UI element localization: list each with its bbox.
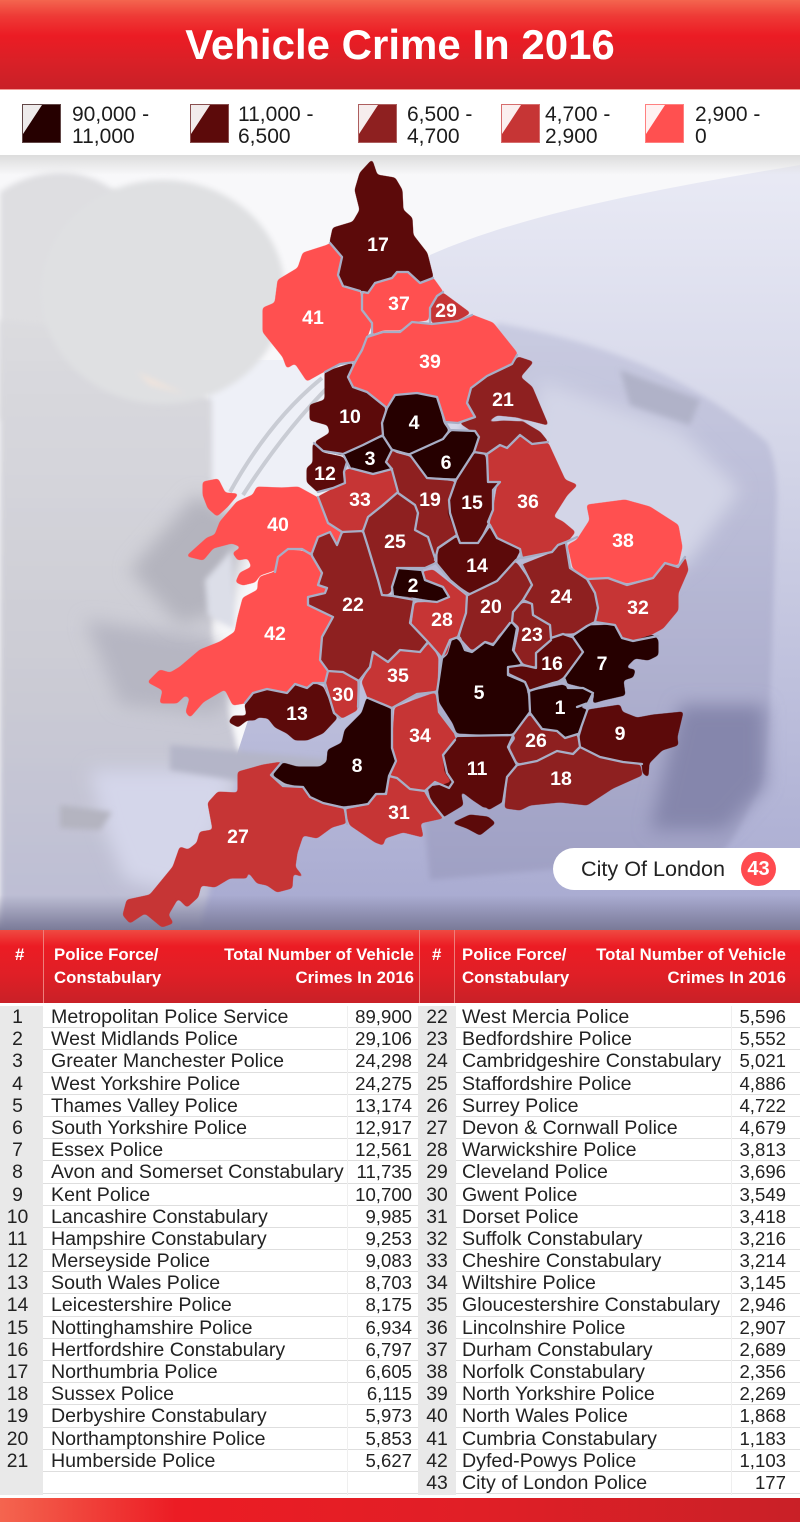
table column left: forces 1 to 21: 9,083 <box>365 1250 412 1271</box>
table header right: Police Force/ <box>462 945 566 964</box>
region 13 South Wales: 13 <box>286 703 308 725</box>
region 8 Avon and Somerset <box>273 698 395 806</box>
table column right: forces 22 to 43: 27 <box>426 1117 448 1139</box>
table column left: forces 1 to 21: 20 <box>7 1428 28 1450</box>
region 40 North Wales: 40 <box>267 514 289 536</box>
region 39 North Yorkshire <box>348 315 517 423</box>
table column left: forces 1 to 21: 6,605 <box>365 1361 412 1382</box>
table header left: # <box>15 945 24 964</box>
legend: 11,000 <box>72 124 135 148</box>
region 13 South Wales <box>229 683 337 740</box>
region 23 Bedfordshire <box>512 603 550 667</box>
table column left: forces 1 to 21: 16 <box>7 1339 28 1361</box>
table column right: forces 22 to 43: 24 <box>426 1050 448 1072</box>
region 39 North Yorkshire: 39 <box>419 351 441 373</box>
table column right: forces 22 to 43: 4,886 <box>739 1073 786 1094</box>
table column left: forces 1 to 21: Kent Police <box>51 1184 150 1206</box>
table header right: Total Number of Vehicle <box>596 945 786 964</box>
table column right: forces 22 to 43: 38 <box>426 1361 448 1383</box>
table column right: forces 22 to 43: 3,214 <box>739 1250 786 1271</box>
region 11 Hampshire: 11 <box>467 758 487 780</box>
table column left: forces 1 to 21: 9,253 <box>365 1228 412 1249</box>
legend item: 11,000 - 6,500 <box>190 103 314 148</box>
region 31 Dorset: 31 <box>388 802 410 824</box>
table column left: forces 1 to 21: 17 <box>7 1361 28 1383</box>
table column right: forces 22 to 43: 5,021 <box>739 1050 786 1071</box>
table column left: forces 1 to 21: Merseyside Police <box>51 1250 210 1272</box>
table column left: forces 1 to 21: 1 <box>12 1006 23 1028</box>
table column right: forces 22 to 43: Surrey Police <box>462 1095 579 1117</box>
legend: 6,500 - <box>407 103 472 126</box>
region 41 Cumbria: 41 <box>302 307 324 329</box>
table column left: forces 1 to 21: 8 <box>12 1161 23 1183</box>
table header right: Crimes In 2016 <box>668 968 786 987</box>
table column right: forces 22 to 43: Cambridgeshire Constabulary <box>462 1050 721 1072</box>
table column right: forces 22 to 43: 33 <box>426 1250 448 1272</box>
table column right: forces 22 to 43: 22 <box>426 1006 448 1028</box>
table column right: forces 22 to 43: Dyfed-Powys Police <box>462 1450 636 1472</box>
table column right: forces 22 to 43: Staffordshire Police <box>462 1073 632 1095</box>
table column left: forces 1 to 21: 11,735 <box>356 1161 412 1182</box>
table column right: forces 22 to 43: 1,183 <box>739 1428 786 1449</box>
region 36 Lincolnshire <box>487 435 577 558</box>
table column left: forces 1 to 21: 9,985 <box>365 1206 412 1227</box>
table column right: forces 22 to 43: 28 <box>426 1139 448 1161</box>
table column right: forces 22 to 43: 43 <box>426 1472 448 1494</box>
region 30 Gwent: 30 <box>332 684 354 706</box>
table column right: forces 22 to 43: Cheshire Constabulary <box>462 1250 661 1272</box>
region 33 Cheshire: 33 <box>349 489 371 511</box>
table column left: forces 1 to 21: Humberside Police <box>51 1450 215 1472</box>
region 24 Cambridgeshire <box>522 543 598 637</box>
region 2 West Midlands <box>392 568 448 601</box>
table column right: forces 22 to 43: 37 <box>426 1339 448 1361</box>
table column right: forces 22 to 43: Bedfordshire Police <box>462 1028 632 1050</box>
region 5 Thames Valley: 5 <box>474 682 485 704</box>
table column left: forces 1 to 21: 18 <box>7 1383 28 1405</box>
table column left: forces 1 to 21: 10,700 <box>355 1184 412 1204</box>
region 29 Cleveland <box>430 293 470 323</box>
table column right: forces 22 to 43: Durham Constabulary <box>462 1339 653 1361</box>
table column left: forces 1 to 21: 13 <box>7 1272 28 1294</box>
region 14 Leicestershire: 14 <box>466 555 488 577</box>
region 10 Lancashire <box>310 363 385 455</box>
region 21 Humberside: 21 <box>492 389 514 411</box>
table column right: forces 22 to 43: 5,552 <box>739 1028 786 1049</box>
table column left: forces 1 to 21: 9 <box>12 1184 23 1206</box>
region 6 South Yorkshire: 6 <box>441 452 452 474</box>
table column right: forces 22 to 43: Warwickshire Police <box>462 1139 637 1161</box>
table column right: forces 22 to 43: North Wales Police <box>462 1405 628 1427</box>
region 34 Wiltshire <box>390 693 455 790</box>
table header right: Constabulary <box>462 968 569 987</box>
legend: 2,900 <box>545 124 598 148</box>
table column left: forces 1 to 21: 5,627 <box>365 1450 412 1471</box>
table column left: forces 1 to 21: 6,115 <box>367 1383 412 1404</box>
table column left: forces 1 to 21: 8,175 <box>365 1294 412 1315</box>
title banner <box>0 0 800 90</box>
region 21 Humberside <box>460 357 548 453</box>
table column right: forces 22 to 43: 3,696 <box>739 1161 786 1182</box>
table column left: forces 1 to 21: 2 <box>12 1028 23 1050</box>
table column left: forces 1 to 21: South Yorkshire Police <box>51 1117 247 1139</box>
table column left: forces 1 to 21: South Wales Police <box>51 1272 220 1294</box>
region 5 Thames Valley <box>437 623 530 735</box>
region 30 Gwent <box>325 672 357 718</box>
legend: 2,900 - <box>695 103 760 126</box>
callout badge <box>741 852 776 886</box>
table column left: forces 1 to 21: 89,900 <box>355 1006 412 1027</box>
table column left: forces 1 to 21: 15 <box>7 1317 28 1339</box>
region 35 Gloucestershire <box>362 643 438 708</box>
table column right: forces 22 to 43: Devon & Cornwall Police <box>462 1117 678 1139</box>
region 4 West Yorkshire: 4 <box>409 412 420 434</box>
table column left: forces 1 to 21: Hampshire Constabulary <box>51 1228 267 1250</box>
region 16 Hertfordshire: 16 <box>541 653 563 675</box>
table column left: forces 1 to 21: 7 <box>12 1139 23 1161</box>
table column right: forces 22 to 43: 5,596 <box>739 1006 786 1027</box>
table column right: forces 22 to 43: 2,356 <box>739 1361 786 1382</box>
region 8 Avon and Somerset: 8 <box>352 755 363 777</box>
table column right: forces 22 to 43: 29 <box>426 1161 448 1183</box>
region 18 Sussex: 18 <box>550 768 572 790</box>
region 36 Lincolnshire: 36 <box>517 491 539 513</box>
region 12 Merseyside: 12 <box>314 463 336 485</box>
legend <box>0 90 800 155</box>
table column left: forces 1 to 21: Leicestershire Police <box>51 1294 232 1316</box>
table column left: forces 1 to 21: 12,561 <box>355 1139 412 1160</box>
table column right: forces 22 to 43: 40 <box>426 1405 448 1427</box>
region 17 Northumbria: 17 <box>367 234 389 256</box>
table column right: forces 22 to 43: 3,549 <box>739 1184 786 1204</box>
table column right: forces 22 to 43: Norfolk Constabulary <box>462 1361 645 1383</box>
region 14 Leicestershire <box>438 527 520 593</box>
table column left: forces 1 to 21: 5,973 <box>365 1405 412 1426</box>
region 12 Merseyside <box>307 443 347 492</box>
region 6 South Yorkshire <box>410 431 478 478</box>
region 29 Cleveland: 29 <box>435 300 457 322</box>
region 42 Dyfed-Powys <box>148 550 333 717</box>
table column right: forces 22 to 43: 31 <box>426 1206 448 1228</box>
region 22 West Mercia <box>308 532 428 680</box>
table column right: forces 22 to 43: 4,679 <box>739 1117 786 1138</box>
region 18 Sussex <box>505 748 642 810</box>
region 17 Northumbria <box>330 160 433 293</box>
table column right: forces 22 to 43: 2,689 <box>739 1339 786 1360</box>
legend item: 6,500 - 4,700 <box>358 103 472 148</box>
table column left: forces 1 to 21: 12,917 <box>355 1117 412 1138</box>
region 19 Derbyshire <box>386 450 457 558</box>
table column left: forces 1 to 21: 5 <box>12 1095 23 1117</box>
callout label: City Of London <box>581 856 725 881</box>
legend item: 4,700 - 2,900 <box>501 103 610 148</box>
region 10 Lancashire: 10 <box>339 406 361 428</box>
table column left: forces 1 to 21: Thames Valley Police <box>51 1095 238 1117</box>
table column left: forces 1 to 21: 19 <box>7 1405 28 1427</box>
region 25 Staffordshire: 25 <box>384 531 406 553</box>
table column left: forces 1 to 21 <box>0 1006 418 1495</box>
table header left <box>0 930 420 1003</box>
table column right: forces 22 to 43: 2,946 <box>739 1294 786 1315</box>
region 20 Northamptonshire <box>460 562 532 650</box>
table column right: forces 22 to 43: 42 <box>426 1450 448 1472</box>
table column right: forces 22 to 43: Gwent Police <box>462 1184 577 1206</box>
region 19 Derbyshire: 19 <box>419 489 441 511</box>
region 23 Bedfordshire: 23 <box>521 624 543 646</box>
region 37 Durham <box>362 272 443 334</box>
table column left: forces 1 to 21: Nottinghamshire Police <box>51 1317 252 1339</box>
region 41 Cumbria <box>263 243 372 381</box>
table header left: Police Force/ <box>54 945 158 964</box>
table column left: forces 1 to 21: 24,298 <box>355 1050 412 1071</box>
table column right: forces 22 to 43: Cumbria Constabulary <box>462 1428 657 1450</box>
table column left: forces 1 to 21: West Yorkshire Police <box>51 1073 240 1095</box>
region 9 Kent: 9 <box>615 723 626 745</box>
table column right: forces 22 to 43: 3,813 <box>739 1139 786 1160</box>
table column right: forces 22 to 43: City of London Police <box>462 1472 647 1494</box>
callout badge: 43 <box>747 858 770 880</box>
region 28 Warwickshire: 28 <box>431 609 453 631</box>
table column right: forces 22 to 43: 3,216 <box>739 1228 786 1249</box>
table column right: forces 22 to 43: West Mercia Police <box>462 1006 629 1028</box>
region 9 Kent <box>580 705 683 777</box>
table column right: forces 22 to 43: North Yorkshire Police <box>462 1383 655 1405</box>
table header left: Constabulary <box>54 968 161 987</box>
legend: 6,500 <box>238 124 291 148</box>
table column left: forces 1 to 21: 3 <box>12 1050 23 1072</box>
region 32 Suffolk: 32 <box>627 597 649 619</box>
table column right: forces 22 to 43: 35 <box>426 1294 448 1316</box>
legend: 4,700 <box>407 124 460 148</box>
table column right: forces 22 to 43: 1,868 <box>739 1405 786 1426</box>
region 22 West Mercia: 22 <box>342 594 364 616</box>
table column right: forces 22 to 43: 3,418 <box>739 1206 786 1227</box>
legend: 90,000 - <box>72 103 149 126</box>
region 33 Cheshire <box>318 469 398 531</box>
region 27 Devon and Cornwall: 27 <box>227 826 249 848</box>
region 38 Norfolk: 38 <box>612 530 634 552</box>
table column left: forces 1 to 21: Greater Manchester Police <box>51 1050 284 1072</box>
table column left: forces 1 to 21: 24,275 <box>355 1073 412 1094</box>
table column right: forces 22 to 43: 34 <box>426 1272 448 1294</box>
table header right: # <box>432 945 441 964</box>
table column left: forces 1 to 21: Essex Police <box>51 1139 163 1161</box>
region 1 Metropolitan <box>528 685 593 737</box>
region 26 Surrey: 26 <box>525 730 547 752</box>
legend item: 2,900 - 0 <box>645 103 760 148</box>
table column right: forces 22 to 43: 2,269 <box>739 1383 786 1404</box>
table column left: forces 1 to 21: 14 <box>7 1294 28 1316</box>
table column right: forces 22 to 43: 177 <box>755 1472 786 1493</box>
table column left: forces 1 to 21: 29,106 <box>355 1028 412 1049</box>
table column left: forces 1 to 21: Northamptonshire Police <box>51 1428 266 1450</box>
table column left: forces 1 to 21: 10 <box>7 1206 28 1228</box>
table column right: forces 22 to 43: Dorset Police <box>462 1206 579 1228</box>
table column left: forces 1 to 21: 12 <box>7 1250 28 1272</box>
region 42 Dyfed-Powys: 42 <box>264 623 286 645</box>
region 2 West Midlands: 2 <box>408 575 419 597</box>
region 15 Nottinghamshire: 15 <box>461 492 483 514</box>
table column left: forces 1 to 21: 13,174 <box>355 1095 412 1116</box>
table column left: forces 1 to 21: West Midlands Police <box>51 1028 238 1050</box>
table column left: forces 1 to 21: Northumbria Police <box>51 1361 218 1383</box>
table header left: Total Number of Vehicle <box>224 945 414 964</box>
table column left: forces 1 to 21: Sussex Police <box>51 1383 174 1405</box>
region 3 Greater Manchester <box>343 437 392 473</box>
table column left: forces 1 to 21: 4 <box>12 1073 23 1095</box>
table column right: forces 22 to 43: Wiltshire Police <box>462 1272 596 1294</box>
table column right: forces 22 to 43: 3,145 <box>739 1272 786 1293</box>
footer bar <box>0 1498 800 1522</box>
table column right: forces 22 to 43: 32 <box>426 1228 448 1250</box>
region 11 Hampshire <box>428 736 517 835</box>
table column left: forces 1 to 21: Derbyshire Constabulary <box>51 1405 267 1427</box>
table column right: forces 22 to 43: 36 <box>426 1317 448 1339</box>
region 25 Staffordshire <box>363 493 435 595</box>
table column right: forces 22 to 43 <box>418 1006 800 1495</box>
legend: 4,700 - <box>545 103 610 126</box>
table header left: Crimes In 2016 <box>296 968 414 987</box>
table column right: forces 22 to 43: Suffolk Constabulary <box>462 1228 642 1250</box>
table column left: forces 1 to 21: 8,703 <box>365 1272 412 1293</box>
region 28 Warwickshire <box>412 570 467 657</box>
legend item: 90,000 - 11,000 <box>22 103 149 148</box>
region 1 Metropolitan: 1 <box>555 697 566 719</box>
table column left: forces 1 to 21: Lancashire Constabulary <box>51 1206 268 1228</box>
table column right: forces 22 to 43: 30 <box>426 1184 448 1206</box>
table column left: forces 1 to 21: 6,797 <box>365 1339 412 1360</box>
region 26 Surrey <box>510 715 579 763</box>
region 37 Durham: 37 <box>388 293 410 315</box>
region 16 Hertfordshire <box>508 635 582 690</box>
region 7 Essex <box>565 625 658 703</box>
table column right: forces 22 to 43: Gloucestershire Constabulary <box>462 1294 720 1316</box>
choropleth map of England and Wales police forces <box>122 160 688 927</box>
legend: 0 <box>695 124 707 148</box>
table column left: forces 1 to 21: 6 <box>12 1117 23 1139</box>
table column left: forces 1 to 21: Hertfordshire Constabulary <box>51 1339 285 1361</box>
table column left: forces 1 to 21: 11 <box>7 1228 28 1250</box>
table column right: forces 22 to 43: 25 <box>426 1073 448 1095</box>
background photo: car thief <box>0 155 800 930</box>
table column right: forces 22 to 43: 41 <box>426 1428 448 1450</box>
region 40 North Wales <box>187 479 342 585</box>
table column left: forces 1 to 21: Avon and Somerset Constabulary <box>51 1161 344 1183</box>
table column right: forces 22 to 43: 26 <box>426 1095 448 1117</box>
legend: 11,000 - <box>238 103 314 126</box>
table column right: forces 22 to 43: 39 <box>426 1383 448 1405</box>
region 38 Norfolk <box>568 500 682 583</box>
region 3 Greater Manchester: 3 <box>365 448 376 470</box>
region 4 West Yorkshire <box>382 393 448 453</box>
table column right: forces 22 to 43: 4,722 <box>739 1095 786 1116</box>
callout: City Of London 43 <box>553 848 800 890</box>
title banner: Vehicle Crime In 2016 <box>185 21 615 68</box>
region 27 Devon and Cornwall <box>123 762 346 927</box>
table column left: forces 1 to 21: Metropolitan Police Service <box>51 1006 288 1028</box>
region 35 Gloucestershire: 35 <box>387 665 409 687</box>
table column left: forces 1 to 21: 5,853 <box>365 1428 412 1449</box>
region 32 Suffolk <box>588 557 688 640</box>
table column right: forces 22 to 43: 2,907 <box>739 1317 786 1338</box>
table column right: forces 22 to 43: Cleveland Police <box>462 1161 608 1183</box>
table column right: forces 22 to 43: 23 <box>426 1028 448 1050</box>
table header right <box>420 930 800 1003</box>
table column right: forces 22 to 43: 1,103 <box>739 1450 786 1471</box>
table column left: forces 1 to 21: 6,934 <box>365 1317 412 1338</box>
region 20 Northamptonshire: 20 <box>480 596 502 618</box>
region 31 Dorset <box>345 777 443 845</box>
table column right: forces 22 to 43: Lincolnshire Police <box>462 1317 625 1339</box>
region 7 Essex: 7 <box>597 653 607 675</box>
region 34 Wiltshire: 34 <box>409 725 431 747</box>
table column left: forces 1 to 21: 21 <box>7 1450 28 1472</box>
region 24 Cambridgeshire: 24 <box>550 586 572 608</box>
region 15 Nottinghamshire <box>448 453 500 542</box>
